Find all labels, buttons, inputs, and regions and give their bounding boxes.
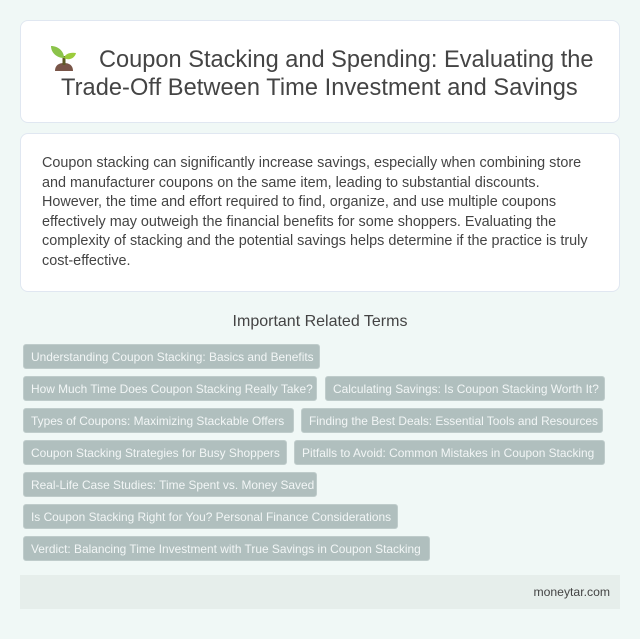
- chip: [301, 408, 603, 433]
- chip: Verdict: Balancing Time Investment with True Savings in Coupon Stacking: [31, 542, 421, 556]
- section heading: Important Related Terms: [233, 313, 407, 330]
- summary paragraph: Coupon stacking can significantly increase savings, especially when combining store: [42, 155, 581, 171]
- summary paragraph: complexity of stacking and the potential savings helps determine if the practice is truly: [42, 233, 588, 249]
- footer bar: [20, 575, 620, 609]
- summary paragraph: and manufacturer coupons on the same item, leading to substantial discounts.: [42, 175, 540, 191]
- related terms chips: [23, 344, 605, 561]
- chip: [23, 344, 320, 369]
- chip: [23, 536, 430, 561]
- summary paragraph: However, the time and effort required to find, organize, and use multiple coupons: [42, 194, 556, 210]
- chip: Calculating Savings: Is Coupon Stacking Worth It?: [333, 382, 599, 396]
- title: Coupon Stacking and Spending: Evaluating the: [99, 47, 594, 73]
- summary card: [20, 133, 620, 292]
- chip: [23, 408, 294, 433]
- chip: Finding the Best Deals: Essential Tools and Resources: [309, 414, 598, 428]
- summary paragraph: [42, 155, 588, 269]
- chip: Real-Life Case Studies: Time Spent vs. Money Saved: [31, 478, 314, 492]
- title: [61, 47, 594, 101]
- footer source: moneytar.com: [533, 585, 610, 599]
- title card: [20, 20, 620, 123]
- chip: [23, 440, 287, 465]
- chip: [23, 376, 317, 401]
- chip: [23, 504, 398, 529]
- chip: How Much Time Does Coupon Stacking Really Take?: [31, 382, 313, 396]
- chip: Pitfalls to Avoid: Common Mistakes in Coupon Stacking: [302, 446, 594, 460]
- chip: [294, 440, 605, 465]
- summary paragraph: cost-effective.: [42, 253, 131, 269]
- summary paragraph: effectively may outweigh the financial benefits for some shoppers. Evaluating the: [42, 214, 556, 230]
- chip: Coupon Stacking Strategies for Busy Shoppers: [31, 446, 280, 460]
- chip: [23, 472, 317, 497]
- title: Trade-Off Between Time Investment and Savings: [61, 75, 578, 101]
- icon: seedling: [51, 46, 76, 71]
- chip: Understanding Coupon Stacking: Basics and Benefits: [31, 350, 314, 364]
- chip: Is Coupon Stacking Right for You? Personal Finance Considerations: [31, 510, 391, 524]
- chip: Types of Coupons: Maximizing Stackable Offers: [31, 414, 284, 428]
- chip: [325, 376, 605, 401]
